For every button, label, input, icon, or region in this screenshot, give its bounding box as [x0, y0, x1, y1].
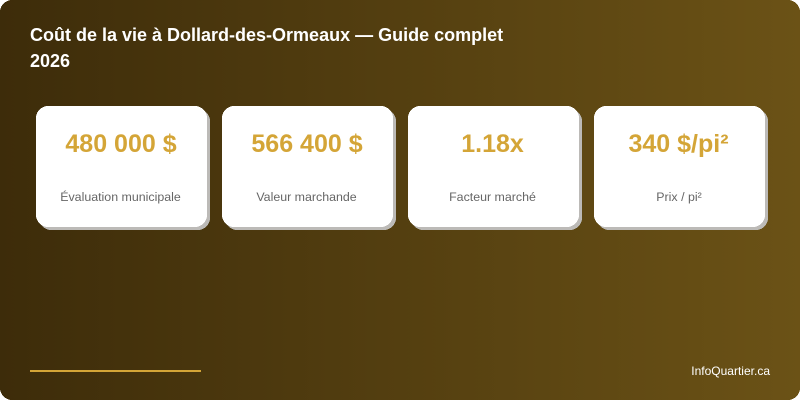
value: market factor: 1.18x: [461, 130, 524, 158]
source credit: InfoQuartier.ca: [691, 364, 770, 378]
card: price per square foot: [594, 106, 768, 230]
card: municipal assessment: [36, 106, 210, 230]
value: assessment: 480 000 $: [65, 130, 177, 158]
card: market factor: [408, 106, 582, 230]
value: price per square foot: 340 $/pi²: [628, 130, 729, 158]
card: market value: [222, 106, 396, 230]
title: [30, 25, 503, 71]
label: market factor: Facteur marché: [449, 190, 536, 204]
title: 2026: [30, 51, 70, 71]
label: market value: Valeur marchande: [256, 190, 357, 204]
value: market value: 566 400 $: [251, 130, 363, 158]
title: Coût de la vie à Dollard-des-Ormeaux — Guide complet: [30, 25, 503, 45]
label: assessment: Évaluation municipale: [60, 189, 181, 204]
label: price per square foot: Prix / pi²: [656, 190, 702, 204]
accent line: [30, 370, 201, 372]
